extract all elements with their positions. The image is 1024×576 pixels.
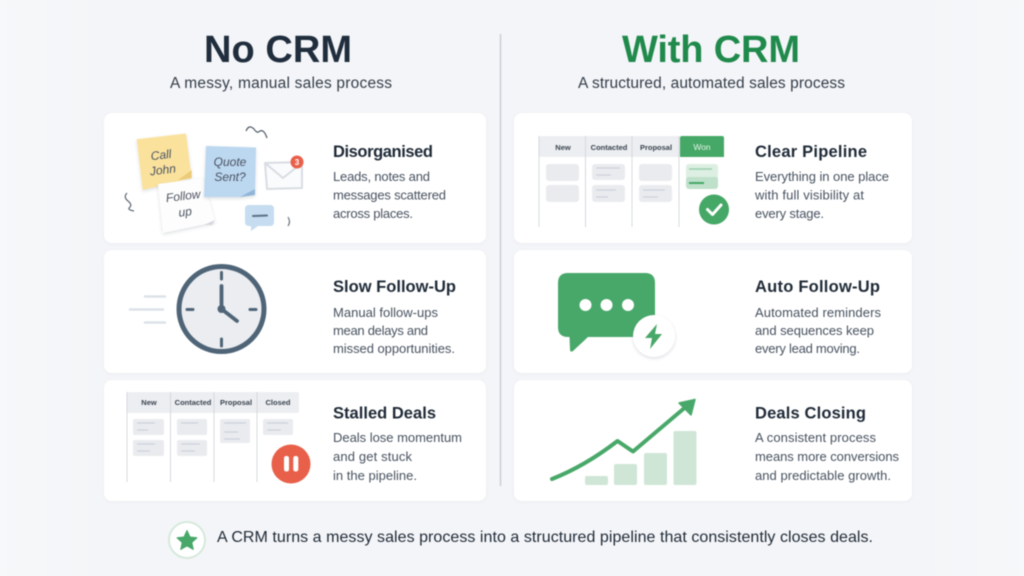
panel: Disorganised	[104, 113, 486, 243]
chart: rising arrow with bars	[552, 400, 696, 485]
text: Deals Closing description: A consistent process	[755, 430, 876, 445]
icon: sticky notes and messages: 3	[295, 158, 300, 167]
title: Slow Follow-Up: Slow Follow-Up	[333, 278, 456, 296]
subheading: No CRM: A messy, manual sales process	[170, 75, 392, 92]
title: Clear Pipeline: Clear Pipeline	[755, 143, 867, 161]
text: Slow Follow-Up description: missed opportunities.	[333, 341, 455, 356]
text: Stalled Deals description: and get stuck	[333, 449, 412, 464]
icon: clock with speed lines	[130, 266, 264, 352]
text: Disorganised description: Leads, notes and	[333, 169, 430, 184]
panel: Slow Follow-Up	[104, 250, 486, 373]
icon: sticky notes and messages: up	[178, 204, 193, 220]
text: Clear Pipeline description: every stage.	[755, 206, 824, 221]
icon: sticky notes and messages: Follow	[165, 187, 203, 205]
text: Stalled Deals description	[333, 430, 462, 483]
diagram: pipeline board with won column: Proposal	[640, 143, 672, 152]
diagram: pipeline board with won column: New	[555, 143, 571, 152]
diagram: stalled pipeline board	[127, 392, 310, 484]
text: Clear Pipeline description: Everything in one place	[755, 169, 889, 184]
diagram: stalled pipeline board: Closed	[265, 398, 291, 407]
diagram: pipeline board with won column	[539, 136, 729, 227]
icon: sticky notes and messages: Sent?	[214, 170, 246, 184]
heading: With CRM: With CRM	[622, 29, 800, 71]
icon: sticky notes and messages: Call	[150, 147, 172, 163]
subheading: With CRM: A structured, automated sales process	[578, 75, 845, 92]
diagram: stalled pipeline board: New	[141, 398, 157, 407]
panel: Stalled Deals	[104, 380, 486, 501]
callout: summary	[169, 522, 873, 558]
icon: sticky notes and messages: Quote	[214, 155, 247, 169]
title: Auto Follow-Up: Auto Follow-Up	[755, 278, 880, 296]
title: Stalled Deals: Stalled Deals	[333, 404, 436, 422]
text: Auto Follow-Up description: Automated reminders	[755, 305, 882, 320]
icon: sticky notes and messages	[125, 127, 303, 233]
title: Disorganised: Disorganised	[333, 143, 433, 161]
panel: Clear Pipeline	[514, 113, 912, 243]
text: Clear Pipeline description: with full visibility at	[754, 188, 864, 202]
diagram: stalled pipeline board: Contacted	[175, 398, 212, 407]
title: Deals Closing: Deals Closing	[755, 404, 866, 422]
text: Disorganised description	[333, 169, 446, 221]
text: Deals Closing description: and predictable growth.	[755, 468, 891, 483]
panel: Deals Closing	[514, 380, 912, 501]
diagram: stalled pipeline board: Proposal	[220, 398, 252, 407]
text: Auto Follow-Up description: and sequences keep	[755, 323, 874, 338]
text: Slow Follow-Up description: mean delays and	[333, 323, 428, 338]
text: Stalled Deals description: in the pipeline.	[333, 468, 417, 483]
icon: sticky notes and messages: John	[148, 161, 177, 179]
icon: chat bubble with lightning bolt	[558, 273, 675, 357]
heading: No CRM: No CRM	[204, 29, 352, 71]
text: Auto Follow-Up description	[755, 305, 882, 356]
text: summary sentence: A CRM turns a messy sales process into a structured pipeline that consistently closes deals.	[217, 529, 873, 546]
text: Deals Closing description	[755, 430, 900, 483]
text: Slow Follow-Up description	[333, 305, 455, 356]
text: Auto Follow-Up description: every lead moving.	[755, 341, 860, 356]
panel: Auto Follow-Up	[514, 250, 912, 373]
text: Deals Closing description: means more conversions	[755, 449, 900, 464]
diagram: pipeline board with won column: Won	[693, 142, 711, 152]
text: Disorganised description: across places.	[333, 206, 413, 221]
icon: star badge	[169, 522, 205, 558]
diagram: pipeline board with won column: Contacted	[591, 143, 628, 152]
text: Clear Pipeline description	[754, 169, 889, 221]
text: Slow Follow-Up description: Manual follow-ups	[333, 305, 438, 320]
text: Stalled Deals description: Deals lose momentum	[333, 430, 462, 445]
text: Disorganised description: messages scattered	[333, 188, 446, 202]
